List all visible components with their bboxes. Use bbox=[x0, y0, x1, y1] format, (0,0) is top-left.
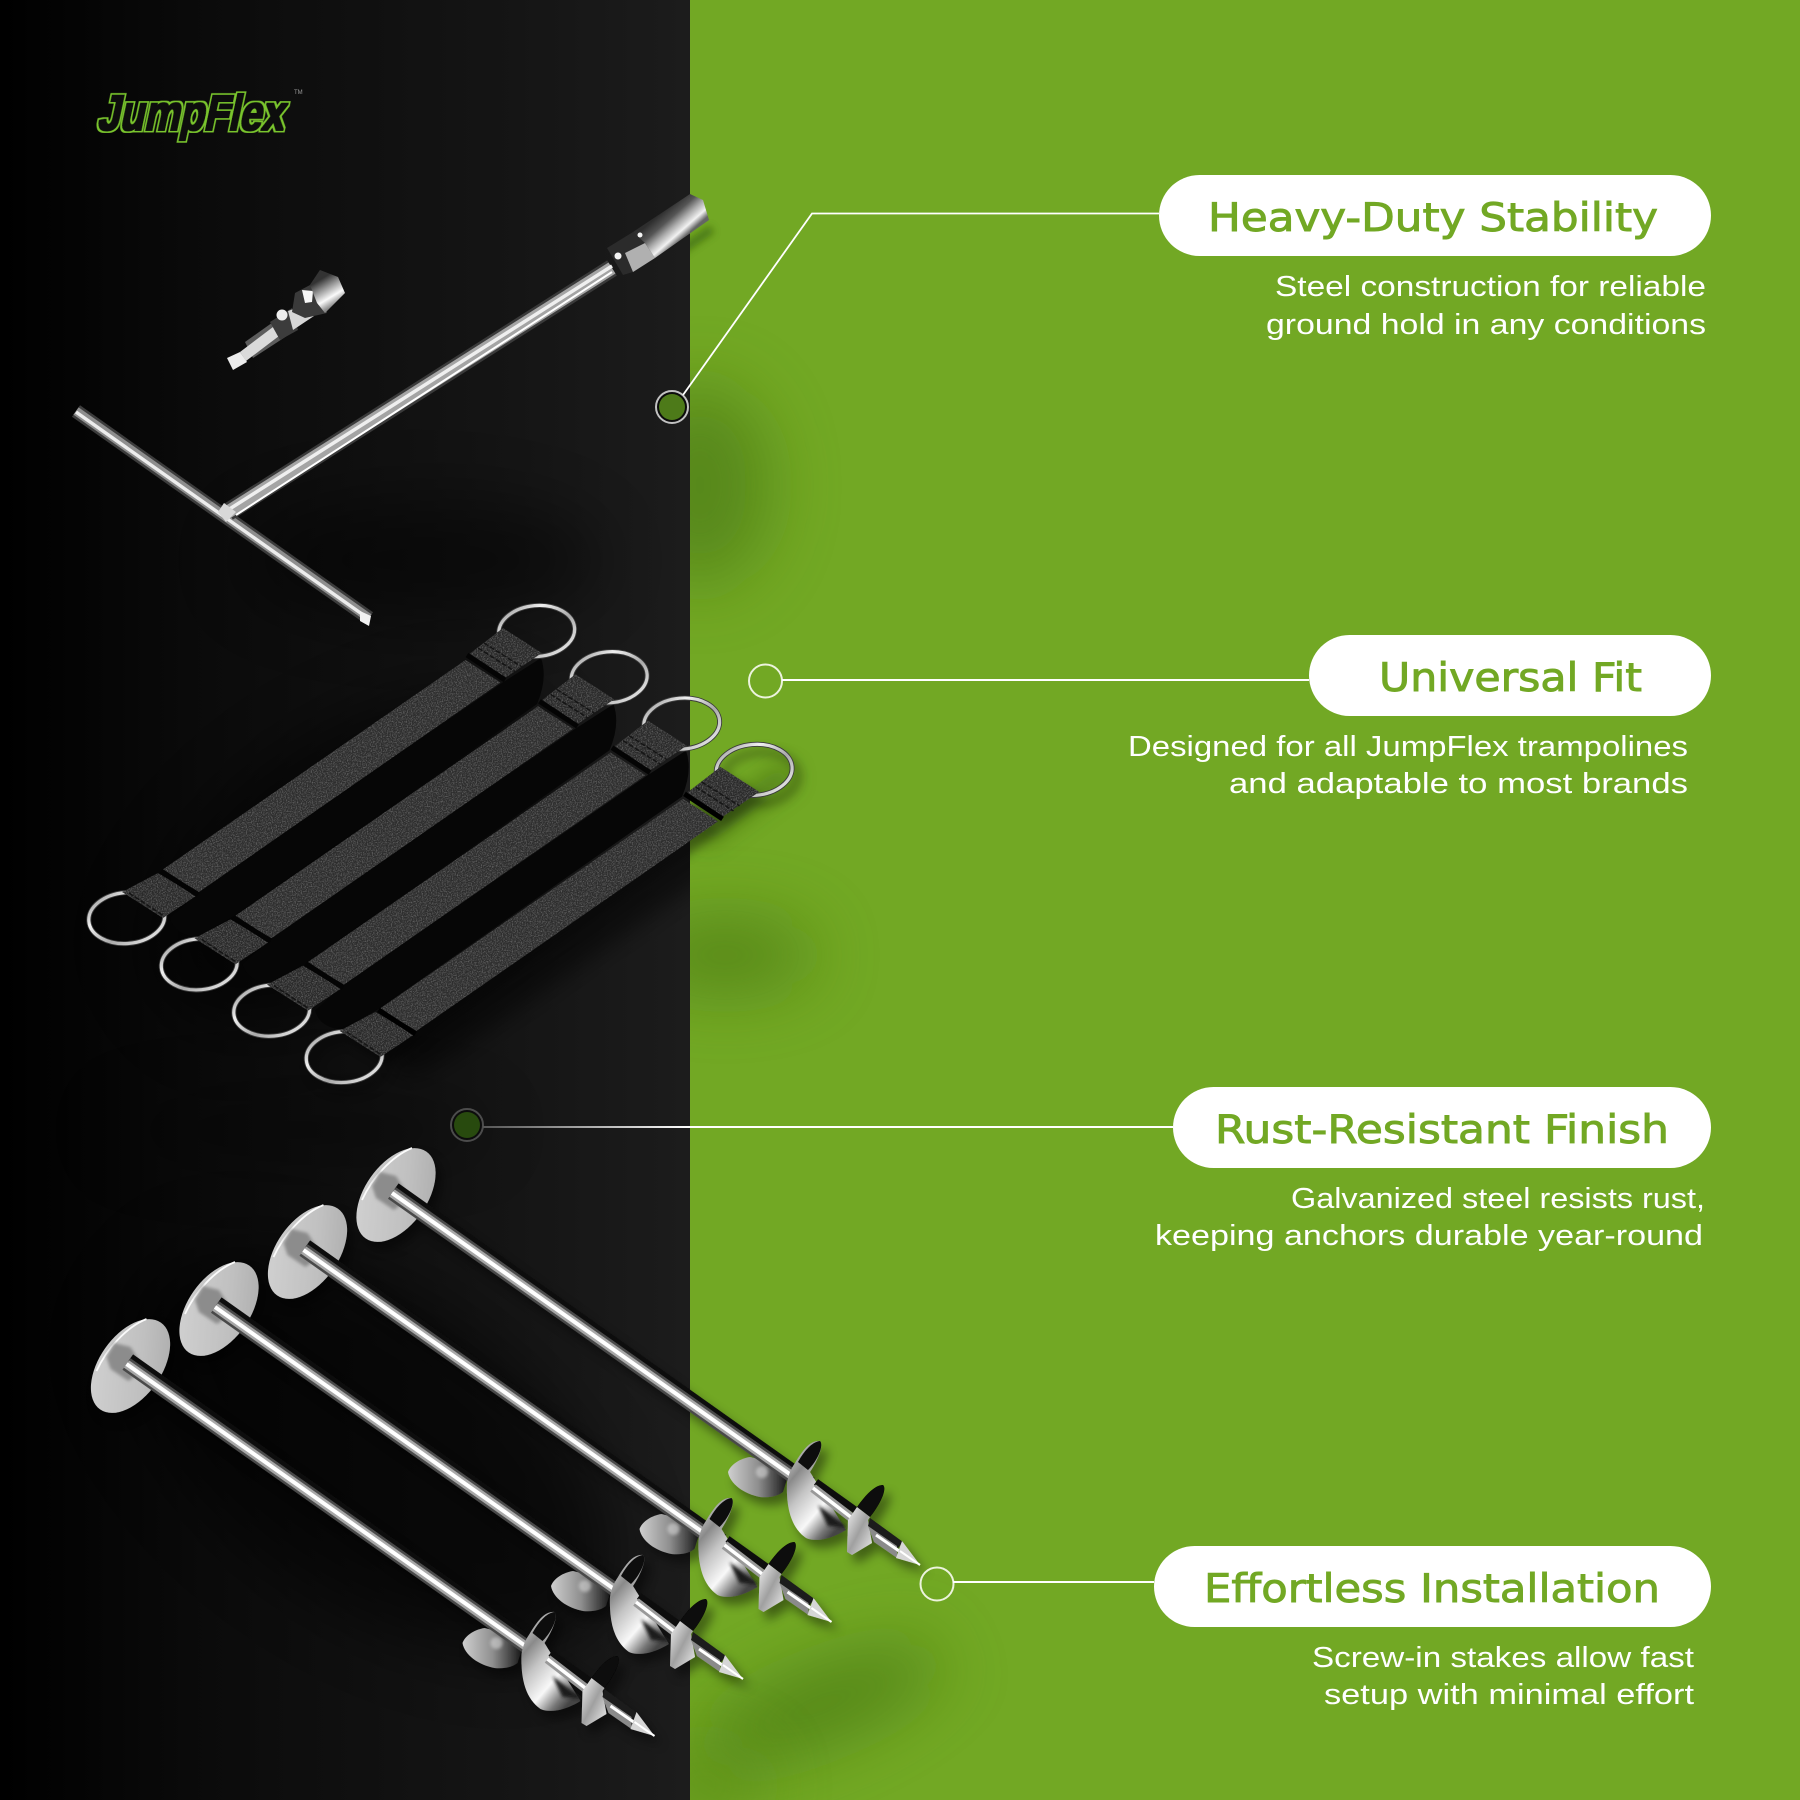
description: Screw-in stakes allow fast bbox=[1312, 1642, 1694, 1674]
strap 3 bbox=[232, 695, 722, 1039]
tool: T-handle socket wrench bbox=[76, 194, 712, 626]
shadows cast on green panel bbox=[630, 385, 954, 1800]
stake 4 bbox=[340, 1134, 920, 1565]
callout 1 connector bbox=[656, 214, 1159, 423]
description bbox=[1155, 1183, 1705, 1252]
callout 2 connector bbox=[749, 664, 1309, 698]
callout 3 connector bbox=[451, 1109, 1173, 1141]
description: ground hold in any conditions bbox=[1266, 309, 1706, 341]
pill heading: Effortless Installation bbox=[1204, 1567, 1660, 1612]
product: trampoline straps bbox=[87, 602, 794, 1086]
description bbox=[1266, 271, 1706, 341]
stake 1 bbox=[75, 1305, 654, 1736]
description bbox=[1128, 731, 1688, 800]
pill heading bbox=[1173, 1087, 1711, 1168]
stake 3 bbox=[252, 1191, 832, 1622]
strap 2 bbox=[159, 649, 649, 993]
description: Galvanized steel resists rust, bbox=[1291, 1183, 1705, 1215]
feature 2: Universal Fit bbox=[1128, 635, 1711, 800]
logo: JumpFlex: JumpFlex bbox=[95, 85, 293, 141]
description bbox=[1312, 1642, 1694, 1711]
feature 3: Rust-Resistant Finish bbox=[1155, 1087, 1711, 1252]
pill heading bbox=[1154, 1546, 1711, 1627]
description: keeping anchors durable year-round bbox=[1155, 1220, 1703, 1252]
pill heading: Rust-Resistant Finish bbox=[1215, 1108, 1669, 1153]
pill heading bbox=[1159, 175, 1711, 256]
description: Steel construction for reliable bbox=[1275, 271, 1706, 303]
description: setup with minimal effort bbox=[1324, 1679, 1694, 1711]
feature 1: Heavy-Duty Stability bbox=[1159, 175, 1711, 341]
description: Designed for all JumpFlex trampolines bbox=[1128, 731, 1688, 763]
stake 2 bbox=[163, 1248, 743, 1679]
pill heading: Heavy-Duty Stability bbox=[1208, 196, 1658, 241]
callout 4 connector bbox=[920, 1568, 1154, 1600]
description: and adaptable to most brands bbox=[1229, 768, 1688, 800]
panel: dark product background bbox=[0, 0, 690, 1800]
logo: JumpFlex: TM bbox=[294, 90, 303, 96]
tool: small socket bit bbox=[227, 270, 345, 370]
product: ground stakes bbox=[75, 1134, 920, 1736]
feature 4: Effortless Installation bbox=[1154, 1546, 1711, 1711]
pill heading: Universal Fit bbox=[1379, 656, 1642, 701]
pill heading bbox=[1309, 635, 1711, 716]
strap 1 bbox=[87, 602, 577, 947]
strap 4 bbox=[304, 741, 794, 1086]
